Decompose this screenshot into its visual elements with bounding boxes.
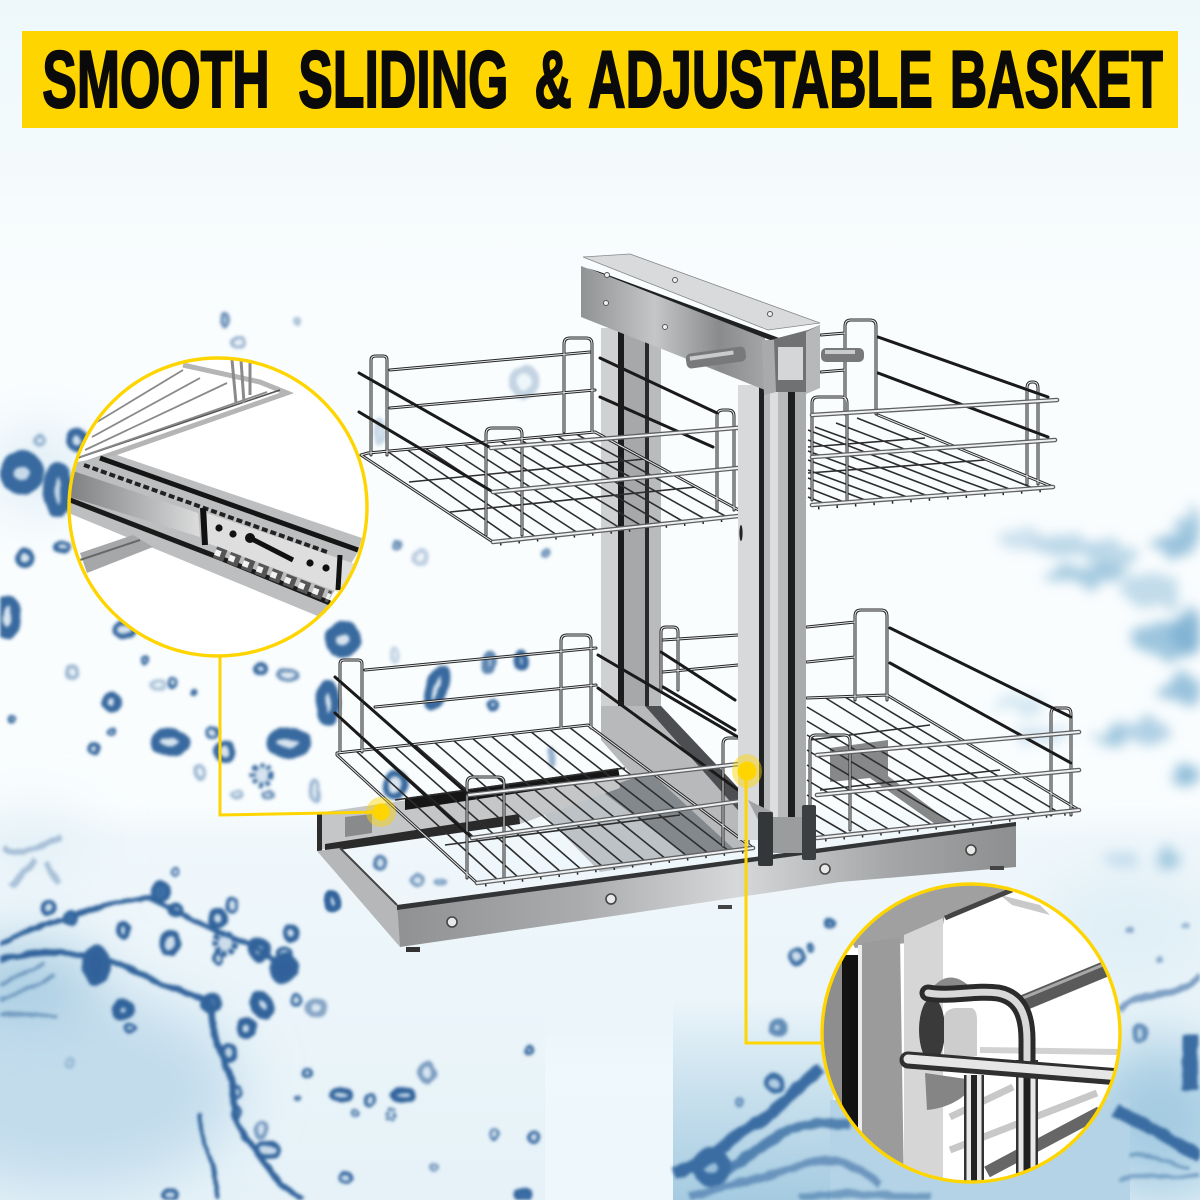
column foot clamps bbox=[748, 800, 816, 866]
droplets upper-left and middle bbox=[0, 314, 553, 910]
title text: SMOOTH bbox=[42, 34, 270, 125]
splash lower-left bbox=[0, 837, 539, 1200]
splash lower-right bbox=[674, 919, 1200, 1198]
hook wire bbox=[908, 992, 1120, 1195]
hotspot: basket hook bbox=[732, 754, 762, 788]
title text: BASKET bbox=[950, 34, 1163, 125]
back column bbox=[601, 328, 661, 710]
callout connector lines bbox=[220, 655, 822, 1043]
title text: ADJUSTABLE bbox=[588, 34, 933, 125]
title text: & bbox=[534, 34, 572, 125]
drawer front bar bbox=[397, 822, 1016, 952]
basket lower left bbox=[335, 635, 753, 885]
title banner bbox=[22, 31, 1178, 128]
mist on right bbox=[996, 511, 1200, 869]
basket lower right bbox=[661, 610, 1079, 840]
callout: slide rail detail bbox=[60, 358, 367, 656]
pivot pins bbox=[685, 346, 864, 369]
drawer base bbox=[317, 706, 950, 947]
front column bbox=[738, 385, 816, 866]
callout: basket hook detail bbox=[822, 884, 1120, 1195]
title text: SLIDING bbox=[298, 34, 508, 125]
top mounting rail bbox=[581, 254, 864, 395]
cross bar bbox=[80, 535, 153, 573]
seam panels bbox=[673, 1000, 833, 1200]
basket upper right bbox=[808, 320, 1057, 508]
hotspot: drawer slide bbox=[366, 797, 396, 827]
slide rail bbox=[71, 455, 362, 600]
basket upper left bbox=[359, 338, 748, 544]
wire shelf corner bbox=[72, 360, 287, 468]
product: corner pull-out basket bbox=[317, 254, 1079, 952]
screws bbox=[447, 845, 976, 927]
